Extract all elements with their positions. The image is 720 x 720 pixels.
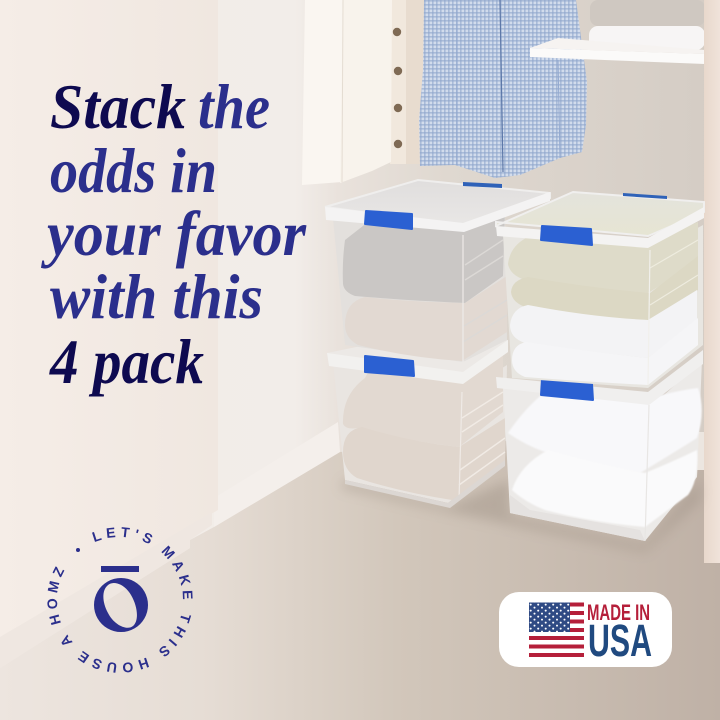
blue checked shirt [419, 0, 587, 178]
logo letter o [94, 578, 148, 632]
storage bin: top left [325, 180, 550, 362]
shelf with folded towels [530, 0, 705, 64]
side fold lines [459, 392, 505, 485]
grey folded blanket [343, 210, 505, 303]
headline: with this [50, 261, 263, 332]
carpet floor [0, 440, 720, 720]
flag [529, 602, 584, 657]
seal dot [76, 548, 80, 552]
baseboard [214, 422, 340, 527]
blue latches [365, 182, 502, 229]
lid [496, 350, 703, 405]
headline: Stack [50, 71, 186, 142]
side fold lines [650, 240, 698, 305]
left wall panel [0, 0, 218, 668]
side fold lines [463, 240, 507, 342]
made in label: MADE IN [587, 600, 650, 625]
headline: the [198, 71, 270, 142]
white pillow [508, 388, 702, 473]
usa label: USA [588, 615, 652, 666]
right wood post [704, 0, 720, 563]
white folded blanket [512, 318, 698, 385]
white folded blanket [510, 290, 697, 358]
clothing rail: cardigan [302, 0, 424, 185]
headline [40, 71, 307, 397]
lid [327, 338, 508, 383]
lid [496, 192, 704, 236]
brand seal [47, 527, 193, 673]
cardigan buttons [393, 28, 402, 148]
blue latch [365, 356, 414, 376]
folded blanket [343, 418, 505, 500]
blue latches [541, 193, 667, 245]
headline: your favor [40, 198, 307, 269]
beige folded blanket [345, 276, 507, 361]
headline: odds in [50, 135, 217, 206]
made in usa badge [499, 592, 672, 667]
white pillow [512, 450, 697, 527]
storage bin: top right [496, 192, 704, 388]
logo bar [101, 566, 139, 572]
green folded blanket [511, 256, 698, 320]
circular slogan: LET'S MAKE THIS HOUSE A HOMZ [47, 527, 193, 673]
headline: 4 pack [49, 326, 204, 397]
bin shadows [340, 480, 700, 552]
baseboard right of bins [690, 432, 704, 470]
folded blanket [343, 350, 503, 447]
blue latch [541, 379, 593, 400]
storage bin: bottom right [496, 350, 703, 541]
green folded blanket [508, 222, 698, 293]
lid [325, 180, 550, 226]
storage bin: bottom left [327, 338, 508, 508]
